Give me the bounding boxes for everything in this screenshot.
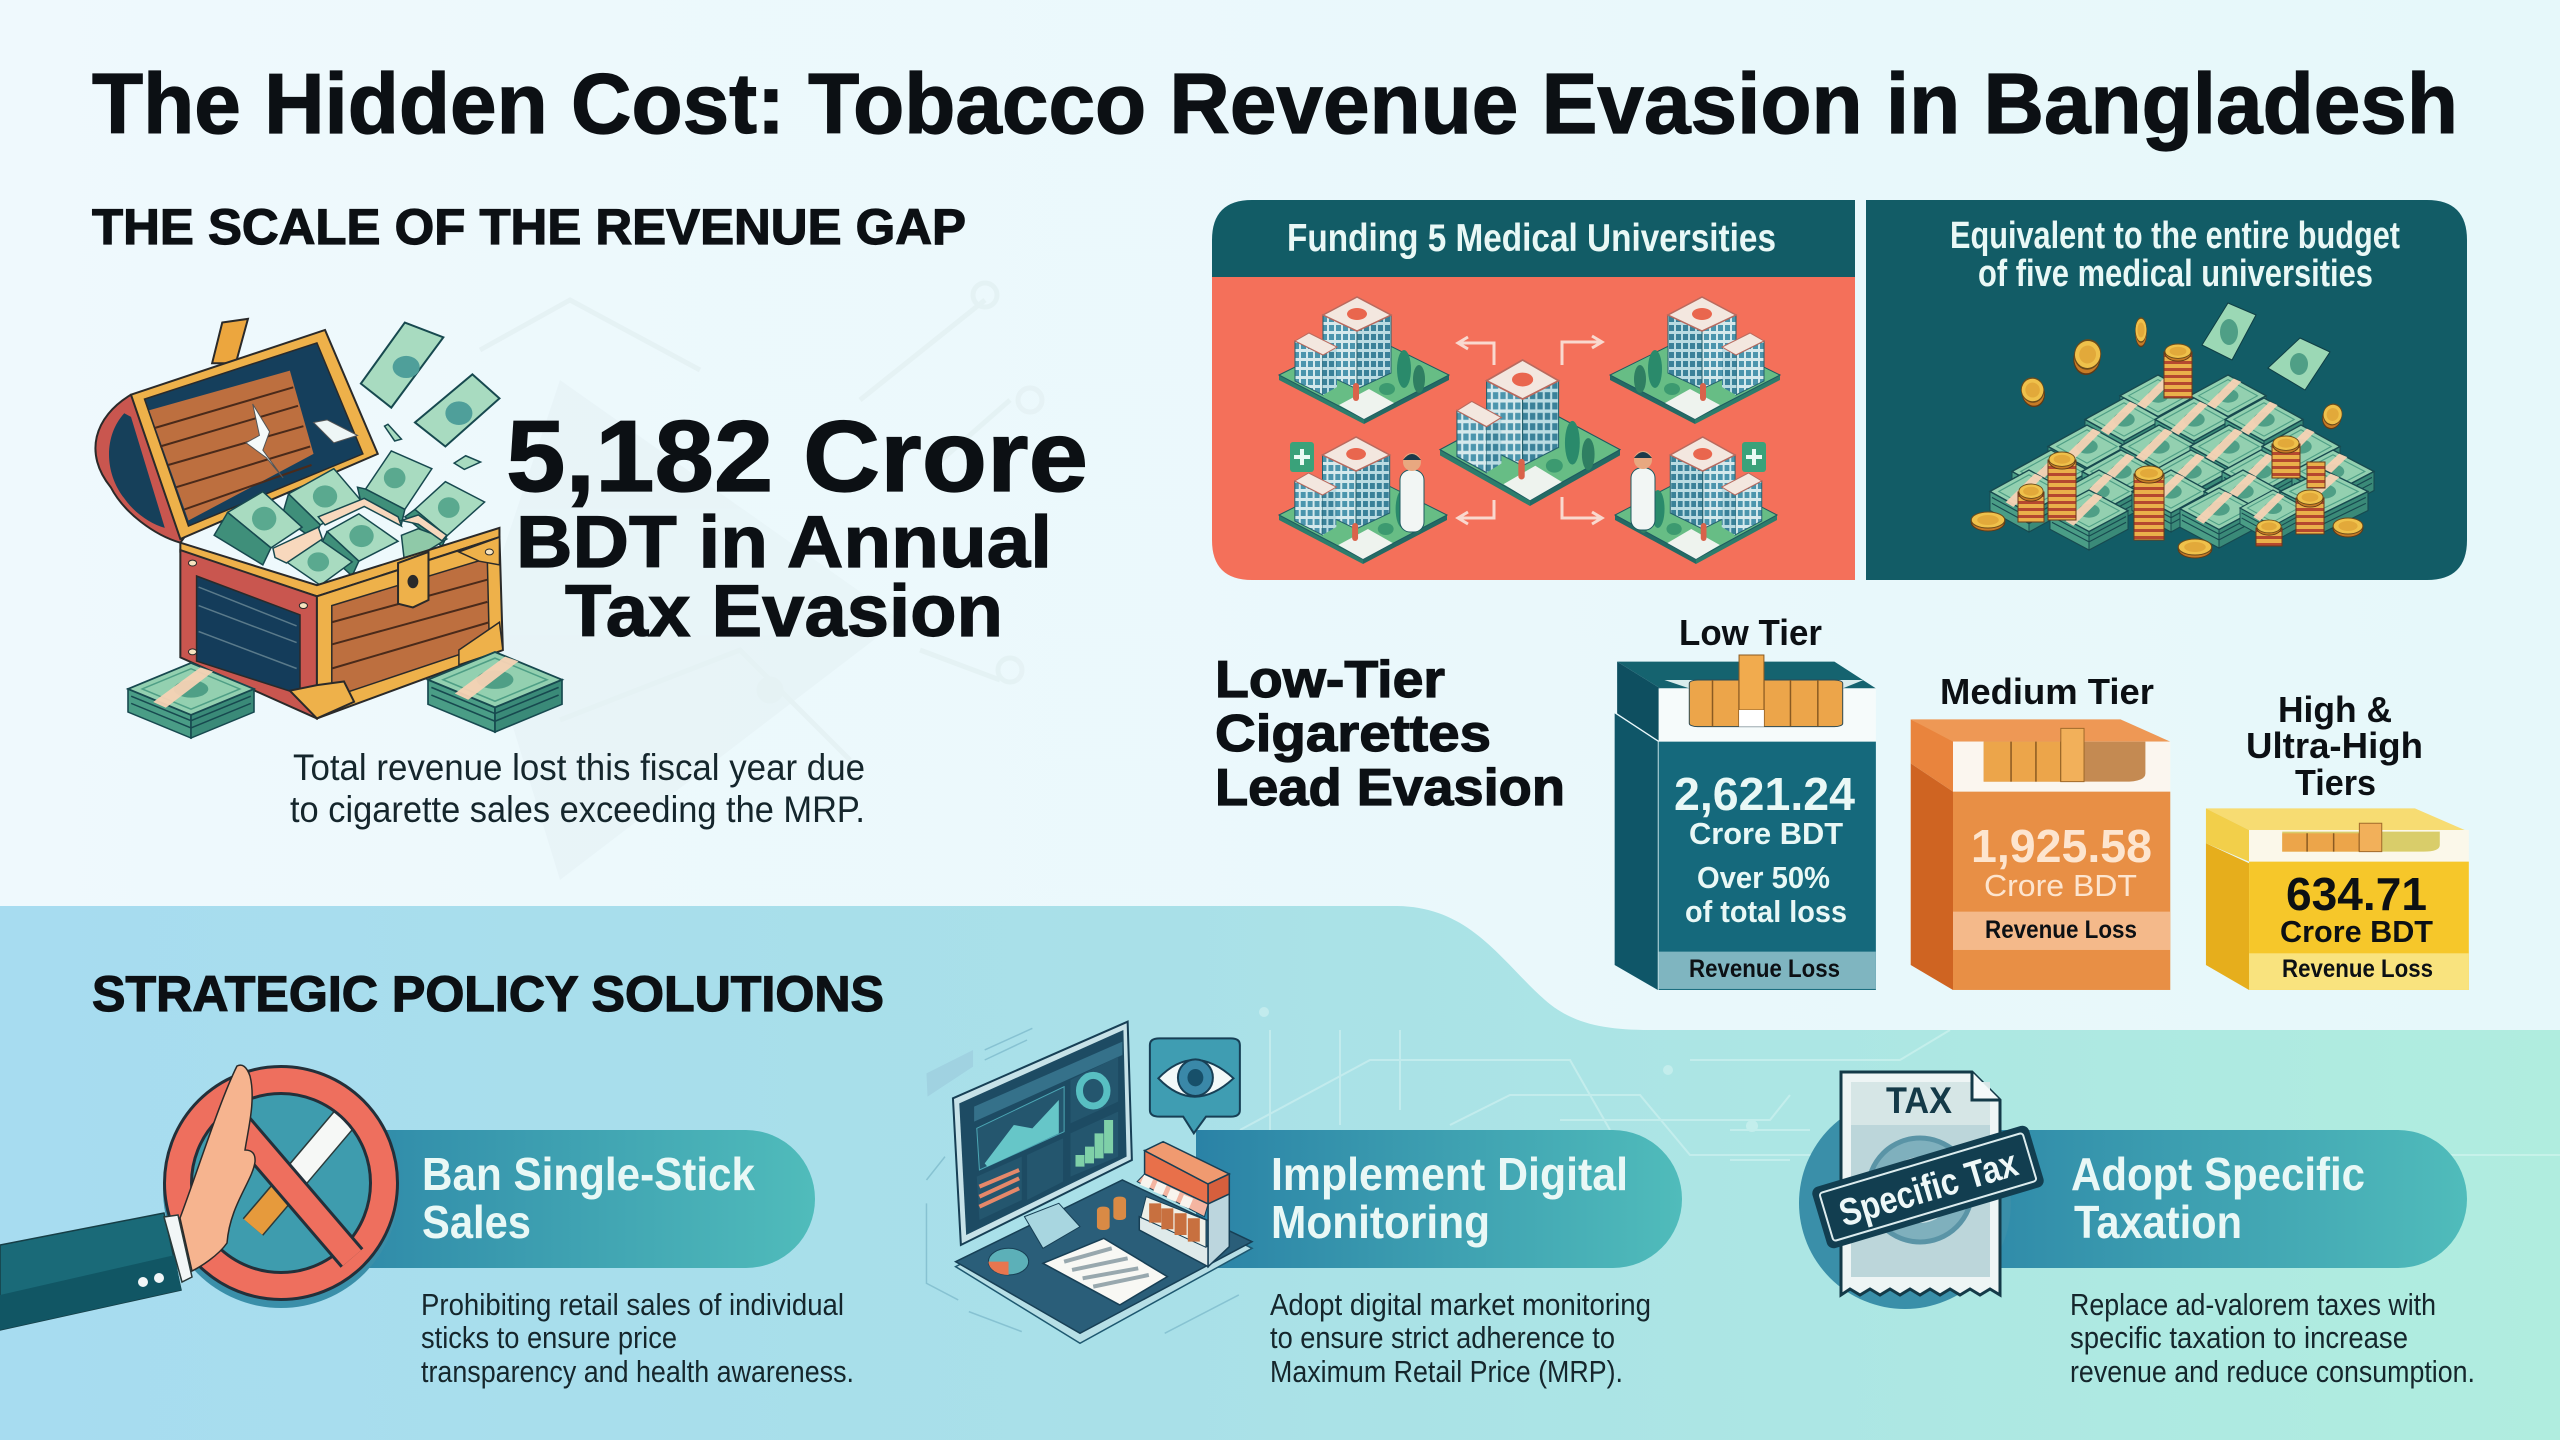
- icon: hospital bottom left: [1279, 437, 1447, 564]
- solution description: Maximum Retail Price (MRP).: [1270, 1354, 1623, 1389]
- pack figures: [1674, 768, 1855, 983]
- solution description: [2070, 1287, 2475, 1389]
- document and pie chart: [988, 1197, 1167, 1305]
- icon: pile of money and coins: [1971, 303, 2374, 558]
- pack body: [1615, 655, 1876, 990]
- heading: low-tier cigarettes lead evasion: [1215, 651, 1565, 817]
- icon: treasure chest with money: [95, 319, 562, 738]
- specific tax stamp: Specific Tax: [1834, 1143, 2023, 1235]
- pack body: [2206, 808, 2469, 990]
- floating banknotes: [361, 323, 499, 469]
- arrows between hospitals: [1458, 336, 1602, 524]
- tier label: Ultra-High: [2246, 725, 2423, 766]
- icon: monitor with retail stall: [926, 1022, 1252, 1343]
- tier label: Tiers: [2295, 762, 2376, 803]
- solution title: Implement Digital: [1271, 1148, 1628, 1200]
- pack figures: Revenue Loss: [1689, 955, 1840, 983]
- eye speech bubble: [1150, 1038, 1240, 1133]
- tier label: [2246, 689, 2423, 803]
- panel: equivalent budget: [1866, 200, 2467, 580]
- solution description: transparency and health awareness.: [421, 1354, 854, 1389]
- solution title: Monitoring: [1271, 1196, 1490, 1248]
- tier label: High &: [2278, 689, 2392, 730]
- chest lid: [95, 330, 378, 543]
- banknote bundles beside chest: [128, 652, 562, 738]
- pack figures: 1,925.58: [1971, 820, 2152, 872]
- solution title: [1271, 1148, 1628, 1248]
- solution title: Taxation: [2074, 1196, 2242, 1248]
- icon: tax document with stamp: [1799, 1072, 2044, 1309]
- solution title: Ban Single-Stick: [422, 1148, 755, 1200]
- panel: funding 5 medical universities: [1212, 200, 1855, 580]
- pack figures: Over 50%: [1697, 860, 1830, 895]
- TAX label: TAX: [1886, 1080, 1952, 1121]
- heading: the scale of the revenue gap: THE SCALE OF THE REVENUE GAP: [92, 199, 966, 255]
- pack figures: [1971, 820, 2152, 944]
- solution description: Prohibiting retail sales of individual: [421, 1287, 844, 1322]
- pack figures: of total loss: [1685, 894, 1847, 929]
- icon: hospital centre: [1440, 360, 1620, 506]
- panel text: Equivalent to the entire budget: [1950, 215, 2400, 257]
- solution title: [422, 1148, 755, 1248]
- solution description: [1270, 1287, 1651, 1389]
- figure unit line two: Tax Evasion: [565, 571, 1003, 652]
- device platform: [956, 1183, 1252, 1343]
- heading: strategic policy solutions: STRATEGIC POLICY SOLUTIONS: [92, 966, 884, 1022]
- text: total revenue note: [290, 747, 865, 830]
- solution description: Replace ad-valorem taxes with: [2070, 1287, 2436, 1322]
- tier label: Low Tier: [1679, 612, 1822, 653]
- bottom section background: [0, 906, 2560, 1440]
- pack figures: Crore BDT: [2280, 914, 2433, 949]
- solution description: specific taxation to increase: [2070, 1320, 2408, 1355]
- pill: [1905, 1130, 2467, 1268]
- text: total revenue note: Total revenue lost this fiscal year due: [293, 747, 865, 788]
- chest lid hinge strap: [212, 319, 248, 363]
- icon: hospital top left: [1279, 297, 1449, 424]
- solution description: Adopt digital market monitoring: [1270, 1287, 1651, 1322]
- money stacks inside chest: [214, 451, 485, 585]
- heading: low-tier cigarettes lead evasion: Cigarettes: [1215, 705, 1491, 763]
- title: The Hidden Cost: Tobacco Revenue Evasion in Bangladesh: [92, 57, 2458, 152]
- heading: low-tier cigarettes lead evasion: Low-Tier: [1215, 651, 1445, 709]
- pack figures: Crore BDT: [1984, 868, 2137, 903]
- big figure: 5,182 crore: [506, 401, 1088, 652]
- cigarette pack: high and ultra-high tiers: [2206, 689, 2469, 990]
- solution description: [421, 1287, 854, 1389]
- pill: [280, 1130, 815, 1268]
- cigarette pack: low tier: [1615, 612, 1876, 990]
- icon: hospital top right: [1610, 297, 1780, 424]
- circuit sketches: [926, 1028, 1239, 1333]
- solution title: Sales: [422, 1196, 531, 1248]
- pack figures: Revenue Loss: [1985, 916, 2137, 944]
- icon: hand stopping cigarette: [0, 1065, 399, 1330]
- big figure: 5,182 crore: 5,182 Crore: [506, 401, 1088, 513]
- retail stall: [1137, 1142, 1229, 1267]
- panel heading: Funding 5 Medical Universities: [1287, 217, 1776, 260]
- panel text: [1950, 215, 2400, 295]
- monitor: [953, 1022, 1132, 1245]
- solution description: to ensure strict adherence to: [1270, 1320, 1615, 1355]
- solution title: [2071, 1148, 2365, 1248]
- panel text: of five medical universities: [1978, 253, 2373, 295]
- pill: [1196, 1130, 1682, 1268]
- solution: adopt specific taxation: [1799, 1072, 2475, 1389]
- pack figures: Crore BDT: [1689, 816, 1843, 851]
- pack figures: 2,621.24: [1674, 768, 1855, 820]
- solution description: sticks to ensure price: [421, 1320, 677, 1355]
- tier label: Medium Tier: [1940, 671, 2154, 712]
- solution title: Adopt Specific: [2071, 1148, 2365, 1200]
- text: total revenue note: to cigarette sales exceeding the MRP.: [290, 789, 865, 830]
- chest body: [180, 528, 503, 718]
- solution: implement digital monitoring: [926, 1022, 1682, 1389]
- icon: green cross signs: [1290, 442, 1766, 472]
- solution: ban single-stick sales: [0, 1065, 854, 1389]
- pack figures: 634.71: [2286, 868, 2427, 920]
- figure unit line one: BDT in Annual: [516, 502, 1052, 583]
- icon: doctors: [1400, 451, 1655, 532]
- pack figures: [2280, 868, 2433, 983]
- heading: low-tier cigarettes lead evasion: Lead Evasion: [1215, 759, 1565, 817]
- icon: hospital bottom right: [1615, 437, 1777, 564]
- cigarette pack: medium tier: [1911, 671, 2170, 990]
- pack figures: Revenue Loss: [2282, 955, 2433, 983]
- pack body: [1911, 719, 2170, 990]
- solution description: revenue and reduce consumption.: [2070, 1354, 2475, 1389]
